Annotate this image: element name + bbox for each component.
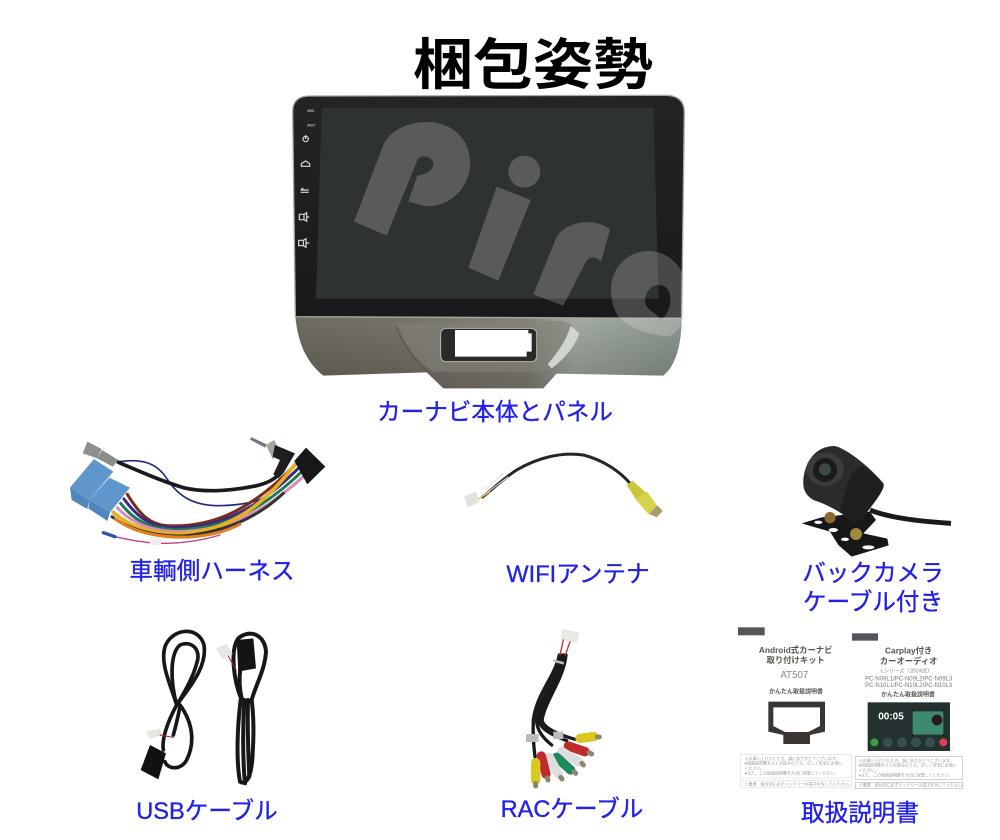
radio opening: [441, 328, 537, 362]
side buttons: [299, 135, 310, 247]
manual: Carplay: かんたん取扱説明書: [881, 691, 935, 699]
looped USB cable: [163, 631, 204, 768]
manual: Carplay: ●取扱説明書をよくお読みのうえ、正しく安全にお使い: [859, 762, 957, 768]
manual: Android: [738, 627, 852, 787]
manual: Android: ※お買い上げいただき、誠にありがとうございます。: [745, 755, 840, 761]
lower trim panel: [295, 317, 682, 388]
bolts: [824, 512, 836, 523]
instruction manuals: [738, 627, 966, 789]
white connector: [561, 629, 579, 643]
RCA cable: [526, 629, 599, 786]
screen: [316, 108, 659, 299]
backup camera: [802, 446, 951, 557]
manual: Android: かんたん取扱説明書: [769, 687, 823, 695]
manual: Android: ください。: [745, 764, 765, 770]
black antenna cable: [118, 462, 278, 491]
label: backup camera with cable: [802, 561, 944, 616]
USB plug: [141, 745, 166, 779]
manual: Carplay: Lシリーズ（2024式）: [881, 667, 933, 675]
manual: Android: Android式カーナビ: [759, 645, 832, 655]
label: backup camera with cable: ケーブル付き: [803, 589, 943, 616]
manual: Carplay: カーオーディオ: [880, 656, 938, 666]
lens: [806, 453, 844, 486]
manual: Carplay: ※重要 取付前に必ずバッテリーの端子を外してください。: [859, 782, 966, 788]
label: instruction manual: 取扱説明書: [801, 800, 919, 827]
label: backup camera with cable: バックカメラ: [802, 561, 944, 587]
label: WIFI antenna: WIFIアンテナ: [506, 562, 650, 588]
watermark logo: [354, 122, 686, 337]
button labels: RST: [307, 123, 316, 128]
cable: [870, 510, 951, 523]
manual: Android: ※重要 取付前に必ずバッテリーの端子を外してください。: [745, 780, 852, 786]
manual: Carplay: ※お買い上げいただき、誠にありがとうございます。: [859, 757, 954, 763]
pink sensor wire: [115, 535, 220, 543]
black ISO connector: [294, 448, 325, 484]
yellow RCA plug: [627, 481, 663, 517]
title: 梱包姿勢: [413, 35, 653, 96]
bracket: [802, 512, 889, 557]
button labels: [307, 108, 316, 128]
head unit bezel: [293, 95, 684, 318]
manual: Carplay: ●また、この取扱説明書を大切に保管してください。: [859, 772, 952, 778]
manual: Android: AT507: [780, 670, 808, 681]
wire bundle: [112, 464, 305, 537]
blue signal wire: [118, 461, 267, 506]
label: navigation unit: カーナビ本体とパネル: [377, 399, 613, 426]
white connector: [464, 491, 479, 507]
manual: Carplay: 00:05: [878, 711, 904, 722]
RCA plugs: [536, 737, 594, 780]
manual: Carplay: PC-N10L1/PC-N10L2/PC-N10L3: [865, 683, 953, 689]
manual: Carplay: Carplay付き: [885, 646, 932, 656]
USB plug body: [237, 638, 256, 672]
USB cables: [141, 631, 266, 783]
black wire bundle: [533, 655, 575, 757]
WIFI antenna cable: [464, 454, 663, 517]
manual: Android: 取り付けキット: [767, 655, 825, 665]
manual: Carplay: [852, 633, 966, 789]
coiled cable: [234, 634, 266, 783]
manual: Android: ●また、この取扱説明書を大切に保管してください。: [745, 770, 838, 776]
car navigation unit with panel: [293, 95, 686, 388]
RCA metal tips: [536, 737, 599, 786]
antenna plug: [250, 437, 295, 478]
label: USB cable: USBケーブル: [136, 798, 278, 825]
gray connectors: [83, 442, 118, 467]
wiring harness: [70, 437, 325, 545]
button labels: MIC: [307, 108, 315, 113]
white connector: [147, 728, 162, 739]
label: RCA cable: RACケーブル: [501, 796, 643, 823]
white connector: [216, 644, 233, 659]
manual: Carplay: ください。: [859, 766, 879, 772]
manual: Carplay: PC-N09L1/PC-N09L2/PC-N09L3: [865, 676, 953, 682]
cable ties: [526, 659, 564, 742]
camera body: [803, 446, 884, 523]
label: harness: 車輌側ハーネス: [129, 558, 295, 585]
manual: Android: ●取扱説明書をよくお読みのうえ、正しく安全にお使い: [745, 760, 843, 766]
blue connectors: [70, 459, 130, 521]
